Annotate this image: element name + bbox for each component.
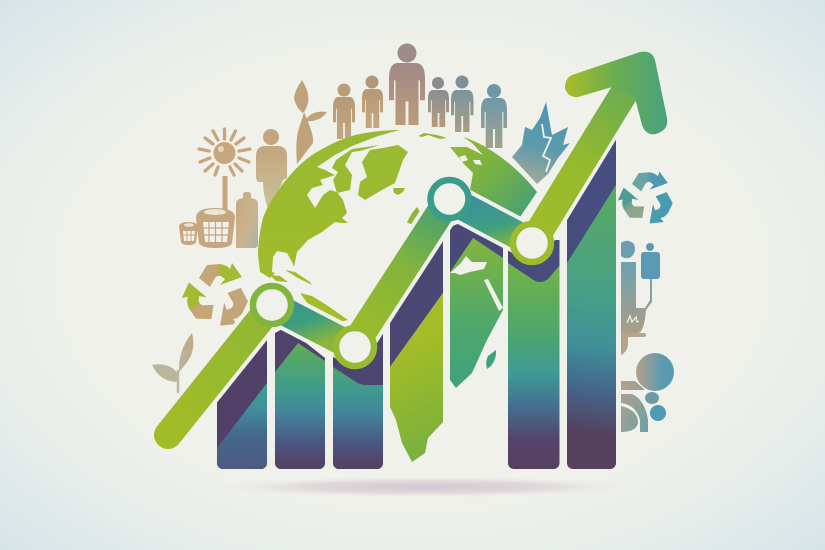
node 4 (513, 224, 551, 262)
land: Asia (450, 137, 537, 220)
icon: arches (621, 381, 648, 432)
land: Canadian islands (332, 145, 380, 193)
figure: person 3 (333, 84, 355, 139)
icon: blue flame spike (512, 102, 570, 184)
icon: bottle (236, 192, 258, 248)
figure: left person (256, 129, 287, 209)
segment 4 (449, 199, 532, 243)
land: North America (258, 130, 400, 278)
bar 5 with eastern Africa (450, 222, 503, 388)
globe (258, 130, 537, 322)
land: Asia cuts (459, 155, 482, 165)
node 3 (430, 180, 468, 218)
bar chart (217, 137, 616, 469)
land: Greenland (358, 145, 408, 200)
icon: sprout (294, 80, 327, 164)
figure: person 7 (481, 84, 507, 148)
figure: tall person (389, 44, 425, 125)
land: Europe bits (407, 207, 428, 225)
land: Arctic islands (418, 133, 447, 139)
figure: person 2 (362, 76, 383, 128)
arrow: right (642, 188, 677, 229)
segment 1 (168, 305, 272, 435)
arrow head (565, 52, 667, 134)
icon: sun on a stem (199, 129, 250, 210)
bar 4 with western Africa (390, 240, 443, 462)
icon: dot (650, 405, 666, 421)
icon: ball (636, 353, 674, 391)
figures along the globe (256, 44, 507, 209)
icon: recycling symbol, blue (614, 171, 677, 229)
icon: waveform (627, 316, 639, 323)
bar 6 (508, 225, 560, 469)
Sahara cut (450, 256, 487, 275)
icon: leaf sprig (152, 333, 193, 393)
ground shadow (200, 476, 650, 498)
land: Iceland (393, 188, 405, 195)
Red Sea cut (484, 279, 503, 311)
arrow: left (177, 277, 219, 327)
bar 2 (275, 327, 325, 469)
icon: recycling symbol, tan and green (177, 263, 254, 333)
icon group: health (621, 241, 674, 432)
icon: tube and monitor (621, 262, 652, 333)
icon: small body (641, 252, 660, 279)
segment 2 (272, 305, 353, 347)
land: Caribbean (270, 270, 348, 322)
figure: person 5 (428, 77, 449, 127)
icon: small basket (179, 222, 198, 245)
icon: small person (646, 243, 654, 251)
arrow: top (632, 171, 668, 191)
arrow: right (211, 283, 254, 333)
arrow: left (614, 183, 649, 224)
trend line with arrow (168, 52, 667, 435)
node 2 (336, 328, 374, 366)
segment 3 (353, 199, 449, 347)
icon: blob 2 (645, 392, 659, 404)
node 1 (253, 286, 291, 324)
land: Madagascar (486, 350, 496, 369)
icon: table (621, 333, 646, 355)
bar 3 (333, 333, 383, 469)
icon: blob (621, 241, 635, 258)
bar 7 (567, 137, 616, 469)
line outline (168, 92, 624, 435)
arrow: top (199, 263, 242, 287)
figure: person 6 (451, 76, 474, 132)
icon: bins, sun and bottle (179, 129, 258, 248)
bar 1 (217, 335, 267, 469)
icon: large basket (196, 208, 235, 248)
segment 5 (532, 90, 626, 243)
